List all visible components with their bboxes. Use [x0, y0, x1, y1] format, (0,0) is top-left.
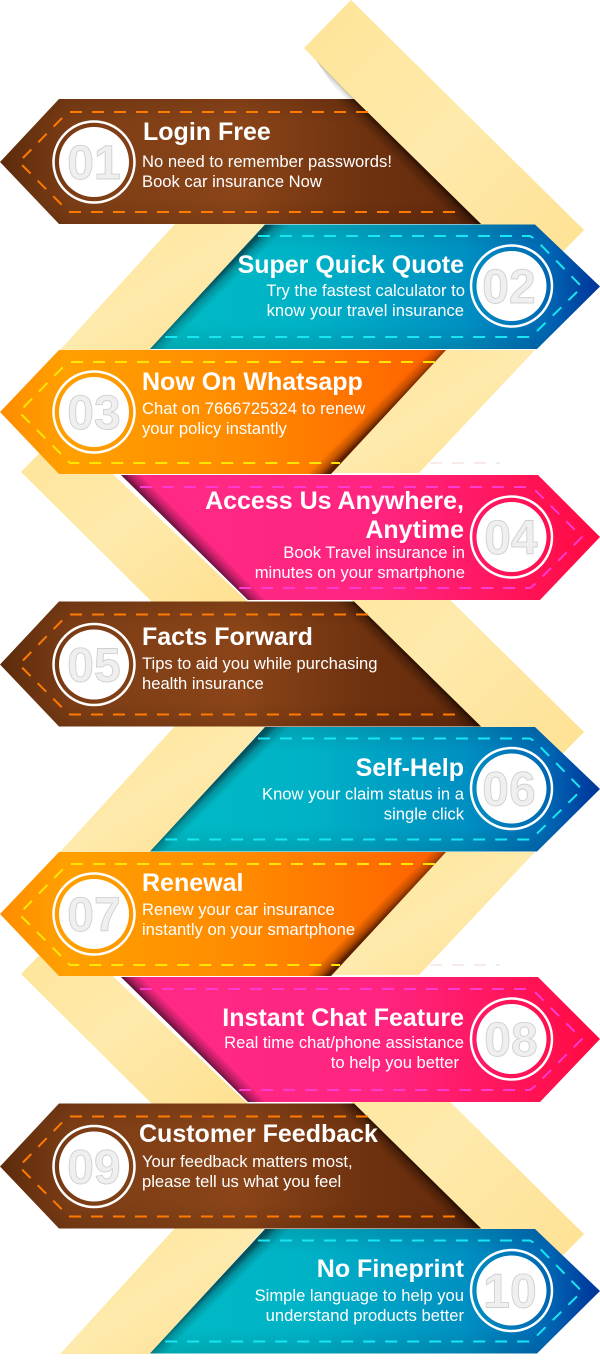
banner 02: Super Quick Quote [150, 224, 600, 349]
banner 09: Customer Feedback: Your feedback matters most, [142, 1152, 353, 1171]
banner 04: Access Us Anywhere, Anytime: Access Us Anywhere, [205, 487, 464, 515]
banner 01: Login Free: Login Free [143, 118, 271, 146]
banner 04: Access Us Anywhere, Anytime: Book Travel insurance in [283, 543, 465, 562]
banner 01: Login Free: No need to remember passwords! [142, 152, 392, 171]
banner 06: Self-Help [150, 727, 600, 852]
banner 10: No Fineprint: 10 [483, 1266, 537, 1318]
banner 07: Renewal: 07 [67, 889, 121, 942]
banner 01: Login Free: Book car insurance Now [142, 172, 323, 191]
banner 08: Instant Chat Feature: to help you better [331, 1053, 459, 1072]
banner 05: Facts Forward [0, 602, 481, 726]
banner 05: Facts Forward: Tips to aid you while purchasing [142, 654, 378, 673]
banner 09: Customer Feedback: please tell us what you feel [142, 1172, 341, 1191]
banner 06: Self-Help: 06 [482, 764, 536, 816]
banner 06: Self-Help: single click [384, 804, 465, 824]
banner 01: Login Free: 01 [67, 137, 121, 190]
banner 02: Super Quick Quote: 02 [482, 261, 536, 314]
banner 04: Access Us Anywhere, Anytime: Anytime [365, 516, 464, 544]
banner 03: Now On Whatsapp: 03 [67, 387, 121, 440]
banner 07: Renewal: instantly on your smartphone [142, 920, 355, 939]
banner 02: Super Quick Quote: know your travel insurance [267, 301, 464, 320]
banner 07: Renewal: Renewal [142, 869, 243, 897]
banner 08: Instant Chat Feature: Real time chat/phone assistance [224, 1033, 464, 1052]
banner 07: Renewal [0, 852, 446, 976]
banner 10: No Fineprint: Simple language to help you [255, 1286, 464, 1305]
banner 03: Now On Whatsapp: your policy instantly [142, 419, 288, 438]
banner 01: Login Free [0, 99, 481, 224]
banner 09: Customer Feedback: 09 [67, 1142, 121, 1194]
banner 10: No Fineprint: No Fineprint [317, 1255, 465, 1283]
banner 02: Super Quick Quote: Try the fastest calculator to [266, 281, 465, 300]
banner 07: Renewal: Renew your car insurance [142, 900, 335, 919]
banner 10: No Fineprint: understand products better [266, 1306, 464, 1325]
banner 03: Now On Whatsapp [0, 350, 446, 474]
banner 03: Now On Whatsapp: Chat on 7666725324 to renew [142, 399, 366, 418]
banner 08: Instant Chat Feature: 08 [484, 1014, 538, 1067]
banner 05: Facts Forward: 05 [67, 640, 121, 692]
banner 08: Instant Chat Feature: Instant Chat Feature [222, 1004, 464, 1032]
banner 08: Instant Chat Feature [121, 977, 600, 1102]
banner 10: No Fineprint [150, 1229, 600, 1354]
banner 09: Customer Feedback [0, 1104, 481, 1228]
banner 04: Access Us Anywhere, Anytime: 04 [484, 512, 538, 565]
banner 09: Customer Feedback: Customer Feedback [139, 1120, 378, 1148]
banner 06: Self-Help: Self-Help [356, 754, 464, 782]
banner 02: Super Quick Quote: Super Quick Quote [238, 251, 464, 279]
banner 03: Now On Whatsapp: Now On Whatsapp [142, 368, 363, 396]
banner 06: Self-Help: Know your claim status in a [262, 784, 465, 804]
banner 05: Facts Forward: health insurance [142, 674, 264, 693]
banner 04: Access Us Anywhere, Anytime: minutes on your smartphone [255, 563, 465, 582]
banner 05: Facts Forward: Facts Forward [142, 623, 313, 651]
banner 04: Access Us Anywhere, Anytime [121, 475, 600, 600]
